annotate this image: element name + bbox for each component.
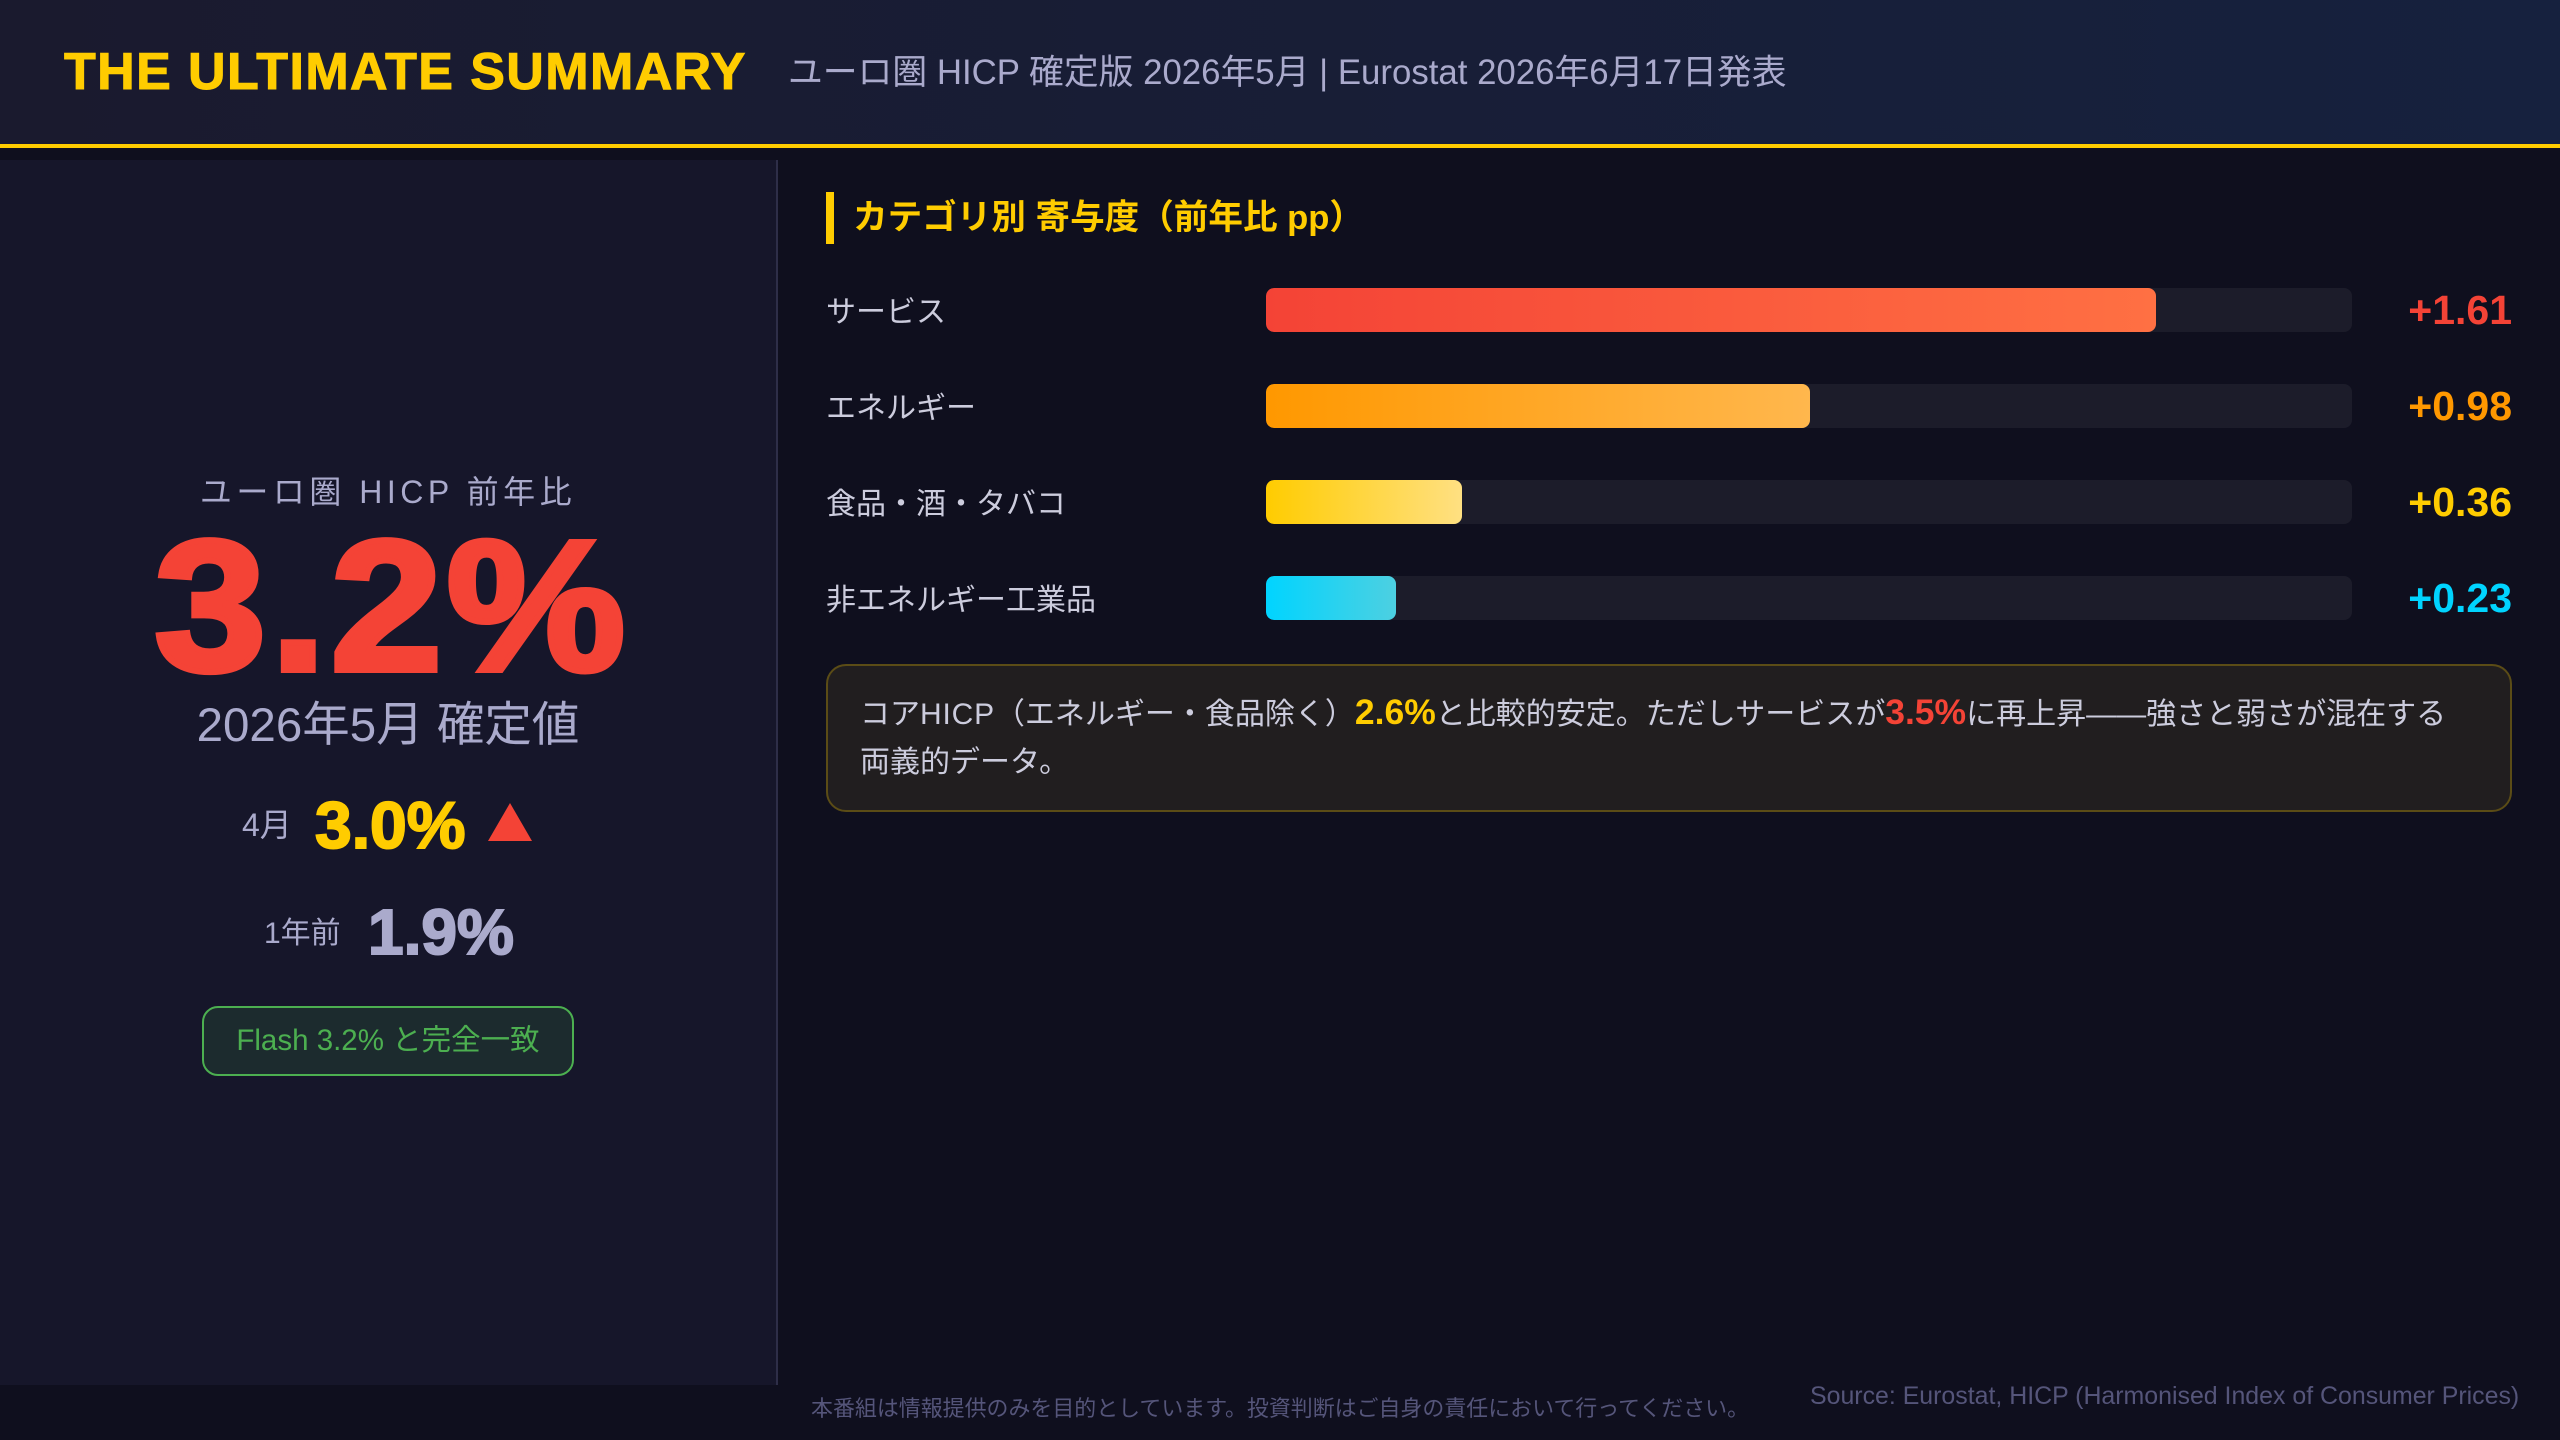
row: services: サービス: [826, 296, 946, 329]
comparison: one year ago: [264, 896, 514, 968]
headline label: ユーロ圏 HICP 前年比: [200, 474, 576, 510]
row: food, alcohol, tobacco: +0.36: [2408, 479, 2512, 525]
row: services: +1.61: [2408, 287, 2512, 333]
year ago value: 1.9%: [368, 896, 514, 968]
source: Source: Eurostat, HICP (Harmonised Index of Consumer Prices): [1810, 1382, 2519, 1410]
year ago label: 1年前: [264, 917, 341, 950]
callout: core HICP note: コアHICP（エネルギー・食品除く）2.6%と比較的安定。ただしサービスが3.5%に再上昇——強さと弱さが混在する: [860, 692, 2446, 732]
row: food, alcohol, tobacco: [826, 479, 2512, 525]
section heading: [826, 192, 1364, 244]
row: non-energy industrial goods: +0.23: [2408, 575, 2512, 621]
subtitle: ユーロ圏 HICP 確定版 2026年5月 | Eurostat 2026年6月17日発表: [788, 53, 1787, 92]
disclaimer: 本番組は情報提供のみを目的としています。投資判断はご自身の責任において行ってください。: [811, 1396, 1749, 1421]
bar chart: contributions: [826, 287, 2512, 621]
April label: 4月: [242, 807, 292, 843]
header band: [0, 0, 2560, 148]
icon: up triangle: [488, 803, 532, 841]
row: non-energy industrial goods: [826, 575, 2512, 621]
headline period: 2026年5月 確定値: [197, 699, 579, 752]
callout: core HICP note: [826, 664, 2512, 812]
headline value: 3.2%: [154, 503, 630, 710]
row: services: [826, 287, 2512, 333]
comparison: April: [242, 788, 532, 862]
flash badge: [202, 1006, 574, 1076]
April value: 3.0%: [315, 788, 465, 862]
panel: headline inflation: [0, 160, 778, 1385]
callout: core HICP note: 両義的データ。: [860, 746, 1069, 779]
row: food, alcohol, tobacco: 食品・酒・タバコ: [826, 488, 1066, 521]
row: energy: [826, 383, 2512, 429]
row: non-energy industrial goods: 非エネルギー工業品: [826, 584, 1096, 617]
title: THE ULTIMATE SUMMARY: [64, 43, 747, 101]
heading accent bar: [826, 192, 834, 244]
flash badge: Flash 3.2% と完全一致: [236, 1024, 540, 1057]
row: energy: エネルギー: [826, 392, 976, 425]
row: energy: +0.98: [2408, 383, 2512, 429]
panel: category contributions: [826, 192, 1364, 244]
heading text: カテゴリ別 寄与度（前年比 pp）: [853, 199, 1364, 237]
